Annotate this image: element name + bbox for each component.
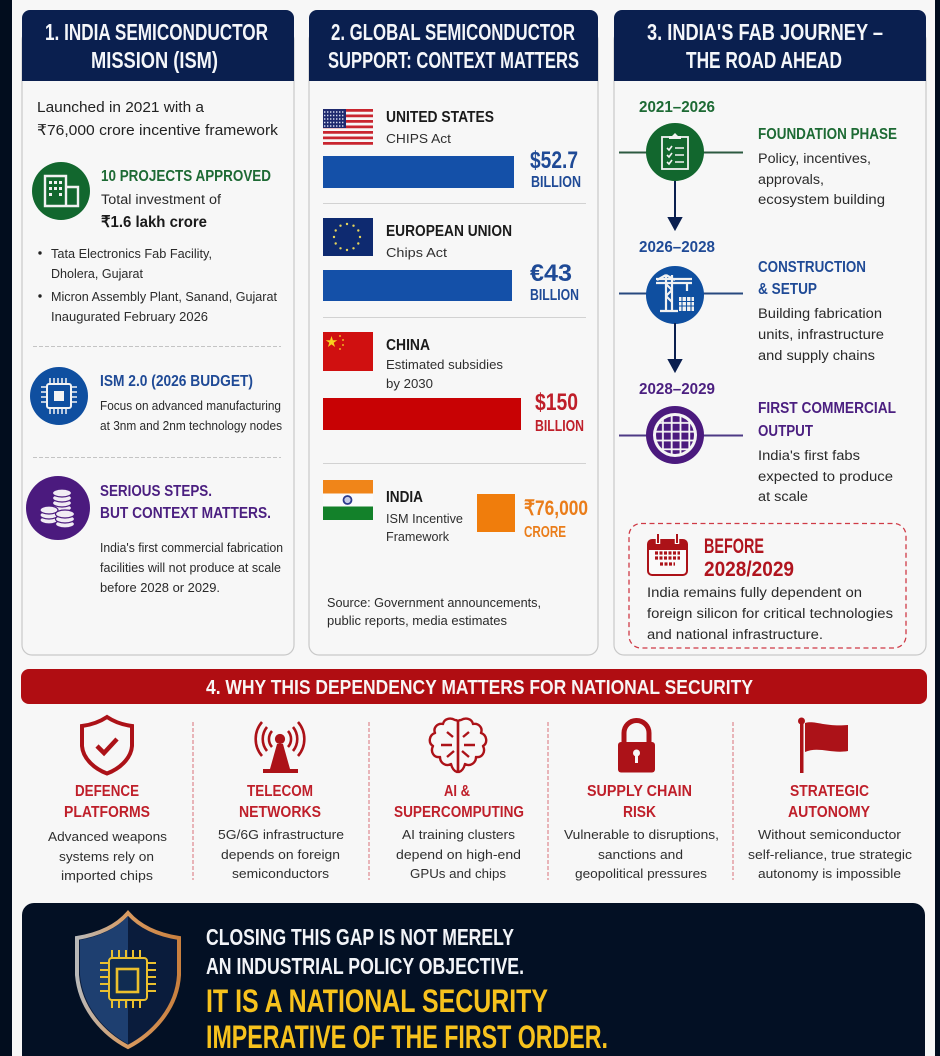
item: supply chain risk: RISK	[623, 804, 656, 821]
heading: panel 1	[22, 10, 294, 81]
serious steps	[100, 483, 283, 595]
intro text: ₹76,000 crore incentive framework	[37, 122, 279, 139]
panel: closing statement	[22, 903, 925, 1056]
callout: before 2028/2029	[629, 524, 906, 648]
row: India: INDIA	[386, 489, 423, 506]
statement text: AN INDUSTRIAL POLICY OBJECTIVE.	[206, 953, 524, 979]
phase: construction: CONSTRUCTION	[758, 259, 866, 276]
panel: Global Semiconductor Support	[309, 10, 598, 655]
phase: first output: OUTPUT	[758, 423, 813, 440]
source note	[327, 596, 541, 628]
ISM 2.0: at 3nm and 2nm technology nodes	[100, 419, 282, 433]
phase: first output: 2028–2029	[639, 381, 715, 398]
row: China: $150	[535, 389, 578, 416]
item: supply chain risk: SUPPLY CHAIN	[587, 783, 692, 800]
project list: Micron Assembly Plant, Sanand, Gujarat	[51, 290, 278, 304]
icon: US flag	[323, 109, 373, 145]
icon: coins	[26, 476, 90, 540]
serious steps: BUT CONTEXT MATTERS.	[100, 505, 271, 522]
projects approved	[101, 168, 271, 231]
icon: shield check	[82, 717, 132, 774]
phase: construction: & SETUP	[758, 281, 817, 298]
heading: panel 1: MISSION (ISM)	[91, 47, 218, 73]
icon: wafer	[646, 406, 704, 464]
phase: construction: Building fabrication	[758, 306, 882, 321]
item: defence platforms: systems rely on	[59, 849, 154, 864]
ISM 2.0	[100, 373, 282, 433]
icon: antenna	[256, 722, 304, 773]
item: defence platforms: Advanced weapons	[48, 829, 168, 844]
row: United States: CHIPS Act	[386, 131, 451, 146]
item: strategic autonomy: self-reliance, true strategic	[748, 847, 913, 862]
heading: panel 3	[614, 10, 926, 81]
item: supply chain risk: Vulnerable to disruptions,	[564, 827, 719, 842]
heading: panel 2	[309, 10, 598, 81]
arrow	[669, 323, 681, 371]
row: India: Framework	[386, 529, 449, 544]
callout: before 2028/2029: 2028/2029	[704, 558, 794, 581]
heading: national security banner	[21, 669, 927, 704]
intro text	[37, 99, 279, 139]
phase: construction: units, infrastructure	[758, 327, 884, 342]
phase: first output: FIRST COMMERCIAL	[758, 400, 896, 417]
source note: Source: Government announcements,	[327, 596, 541, 610]
item: supply chain risk: sanctions and	[598, 847, 683, 862]
projects approved: ₹1.6 lakh crore	[101, 214, 207, 231]
panel: India Semiconductor Mission	[22, 10, 294, 655]
ISM 2.0: ISM 2.0 (2026 BUDGET)	[100, 373, 253, 390]
phase: foundation: ecosystem building	[758, 192, 885, 207]
phase: foundation: FOUNDATION PHASE	[758, 126, 897, 143]
projects approved: Total investment of	[101, 192, 221, 207]
serious steps: facilities will not produce at scale	[100, 561, 281, 575]
phase: foundation: 2021–2026	[639, 99, 715, 116]
callout: before 2028/2029: India remains fully dependent on	[647, 585, 862, 600]
row: United States: BILLION	[531, 174, 581, 191]
phase: construction: 2026–2028	[639, 239, 715, 256]
row: China	[323, 332, 584, 435]
row: United States: UNITED STATES	[386, 109, 494, 126]
phase: first output: India's first fabs	[758, 448, 860, 463]
callout: before 2028/2029: foreign silicon for critical technologies	[647, 606, 893, 621]
item: strategic autonomy: Without semiconductor	[758, 827, 902, 842]
project list: Tata Electronics Fab Facility,	[51, 247, 212, 261]
item: strategic autonomy: autonomy is impossible	[758, 866, 901, 881]
heading: national security banner: 4. WHY THIS DEPENDENCY MATTERS FOR NATIONAL SECURITY	[206, 677, 754, 699]
phase: construction	[619, 239, 884, 371]
item: defence platforms	[48, 717, 168, 883]
statement text: CLOSING THIS GAP IS NOT MERELY	[206, 924, 514, 950]
project list	[38, 247, 278, 324]
intro text: Launched in 2021 with a	[37, 99, 205, 116]
row: India: ₹76,000	[524, 497, 588, 520]
serious steps: SERIOUS STEPS.	[100, 483, 212, 500]
item: strategic autonomy: STRATEGIC	[790, 783, 869, 800]
icon: crane	[646, 266, 704, 324]
icon: EU flag	[323, 218, 373, 256]
item: defence platforms: imported chips	[61, 868, 154, 883]
item: telecom networks: TELECOM	[247, 783, 313, 800]
statement text: IT IS A NATIONAL SECURITY	[206, 983, 548, 1019]
item: telecom networks	[218, 722, 344, 881]
row: India: ISM Incentive	[386, 511, 463, 526]
callout: before 2028/2029: BEFORE	[704, 535, 764, 558]
row: United States	[323, 109, 581, 191]
serious steps: before 2028 or 2029.	[100, 581, 220, 595]
icon: chip	[30, 367, 88, 425]
phase: first output	[619, 381, 896, 504]
panel: India's Fab Journey	[614, 10, 926, 655]
source note: public reports, media estimates	[327, 614, 507, 628]
row: European Union	[323, 218, 579, 304]
icon: gold chip shield	[77, 913, 179, 1047]
heading: panel 1: 1. INDIA SEMICONDUCTOR	[45, 19, 268, 45]
callout: before 2028/2029: and national infrastructure.	[647, 627, 823, 642]
row: India	[323, 480, 588, 544]
item: defence platforms: PLATFORMS	[64, 804, 150, 821]
item: AI and supercomputing: AI training clusters	[402, 827, 516, 842]
row: United States: $52.7	[530, 147, 578, 174]
row: India: CRORE	[524, 524, 566, 541]
phase: foundation: Policy, incentives,	[758, 151, 871, 166]
icon: flag	[798, 718, 848, 773]
item: telecom networks: depends on foreign	[221, 847, 340, 862]
item: AI and supercomputing	[394, 719, 524, 881]
phase: first output: expected to produce	[758, 469, 893, 484]
icon: padlock	[618, 720, 655, 772]
item: AI and supercomputing: depend on high-end	[396, 847, 521, 862]
item: defence platforms: DEFENCE	[75, 783, 139, 800]
heading: panel 2: 2. GLOBAL SEMICONDUCTOR	[331, 19, 575, 45]
row: China: CHINA	[386, 337, 430, 354]
row: European Union: €43	[530, 260, 572, 287]
row: China: Estimated subsidies	[386, 357, 503, 372]
row: European Union: EUROPEAN UNION	[386, 223, 512, 240]
icon: building	[32, 162, 90, 220]
item: strategic autonomy: AUTONOMY	[788, 804, 870, 821]
phase: first output: at scale	[758, 489, 808, 504]
project list: Inaugurated February 2026	[51, 310, 208, 324]
item: supply chain risk: geopolitical pressures	[575, 866, 708, 881]
projects approved: 10 PROJECTS APPROVED	[101, 168, 271, 185]
phase: foundation: approvals,	[758, 172, 824, 187]
serious steps: India's first commercial fabrication	[100, 541, 283, 555]
arrow	[669, 181, 681, 229]
row: European Union: Chips Act	[386, 245, 447, 260]
icon: calendar	[648, 534, 687, 575]
icon: clipboard	[646, 123, 704, 181]
ISM 2.0: Focus on advanced manufacturing	[100, 399, 281, 413]
row: European Union: BILLION	[530, 287, 579, 304]
project list: Dholera, Gujarat	[51, 267, 144, 281]
icon: India flag	[323, 480, 373, 520]
icon: China flag	[323, 332, 373, 371]
item: telecom networks: NETWORKS	[239, 804, 321, 821]
heading: panel 2: SUPPORT: CONTEXT MATTERS	[328, 47, 579, 73]
row: China: by 2030	[386, 376, 433, 391]
item: supply chain risk	[564, 720, 719, 881]
item: AI and supercomputing: GPUs and chips	[410, 866, 507, 881]
phase: construction: and supply chains	[758, 348, 875, 363]
statement text: IMPERATIVE OF THE FIRST ORDER.	[206, 1019, 608, 1055]
phase: foundation	[619, 99, 897, 229]
icon: brain	[430, 719, 486, 772]
item: telecom networks: semiconductors	[232, 866, 330, 881]
statement text	[206, 924, 608, 1055]
item: AI and supercomputing: AI &	[444, 783, 470, 800]
row: China: BILLION	[535, 418, 584, 435]
heading: panel 3: 3. INDIA'S FAB JOURNEY –	[647, 19, 883, 45]
heading: panel 3: THE ROAD AHEAD	[686, 47, 842, 73]
item: telecom networks: 5G/6G infrastructure	[218, 827, 344, 842]
item: AI and supercomputing: SUPERCOMPUTING	[394, 804, 524, 821]
item: strategic autonomy	[748, 718, 913, 881]
